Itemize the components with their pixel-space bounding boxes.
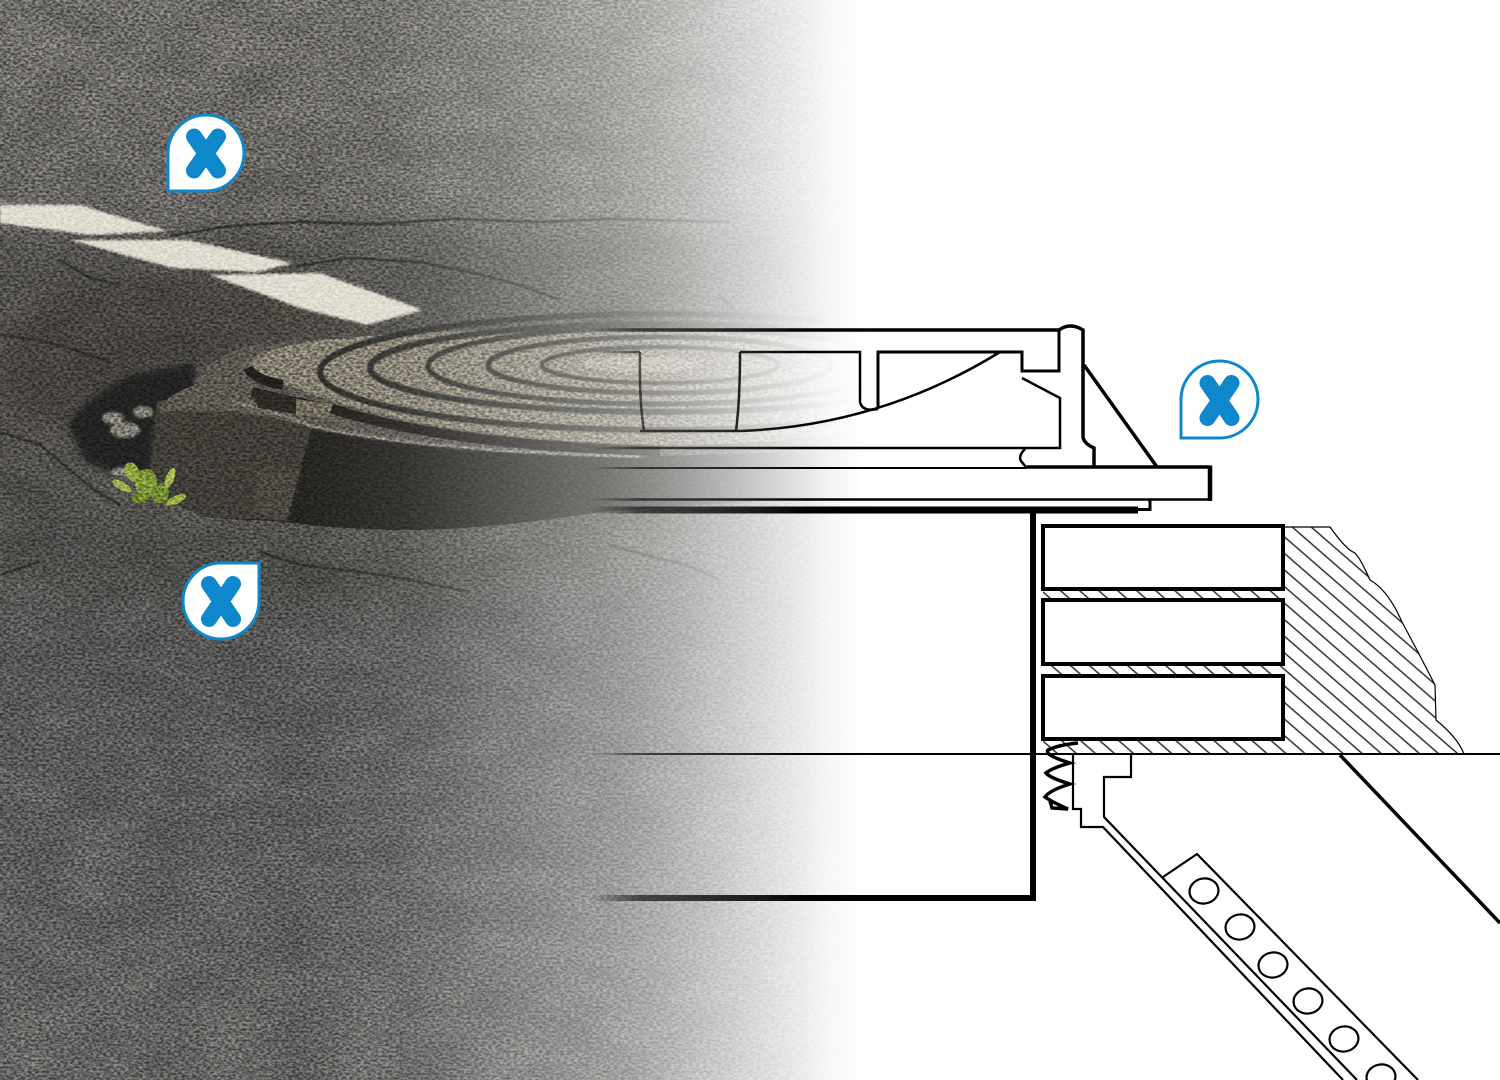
flange plate: [590, 466, 1210, 510]
shaft wall: [590, 510, 1500, 900]
marker: X badge top left: [168, 115, 244, 191]
hatched concrete fill: [1043, 527, 1464, 754]
perforated ladder strip: [1163, 854, 1418, 1080]
lower liner flange and sloped wall: [1073, 754, 1357, 1080]
spring seal: [1045, 743, 1078, 809]
outer diagonal wall: [1340, 755, 1500, 923]
cover frame top line and inner shapes: [590, 326, 1157, 468]
pothole: [68, 362, 195, 478]
marker: X badge lower left: [183, 563, 259, 639]
concentric rings: [320, 314, 1000, 430]
manhole cover: [248, 329, 1020, 451]
manhole outer rim: [157, 330, 900, 458]
cracks: [0, 219, 745, 592]
weed plant: [110, 460, 188, 508]
road marking: [0, 205, 423, 325]
brick blocks: [1043, 526, 1283, 739]
technical drawing of manhole cross-section: [590, 326, 1500, 1080]
manhole collar wall: [150, 411, 860, 530]
marker: X badge right: [1181, 361, 1258, 438]
